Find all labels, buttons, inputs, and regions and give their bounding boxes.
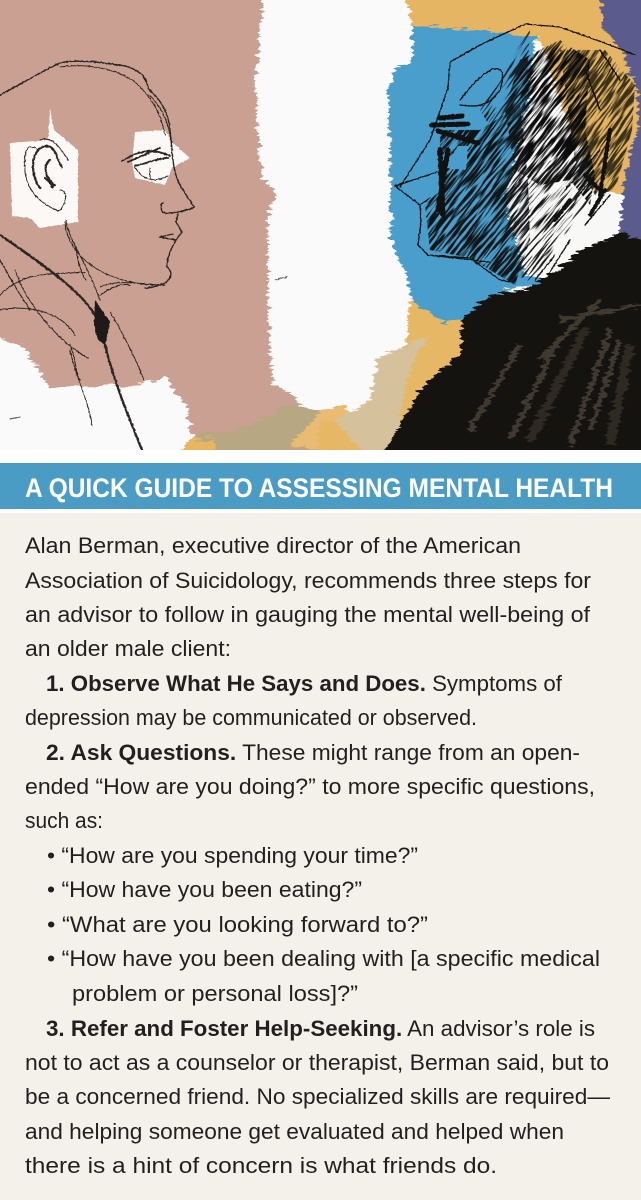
paint: white patches behind ear and eye (10, 108, 190, 228)
head outline and features (395, 24, 635, 282)
figure: right man, dark cross-hatched head and coat (384, 23, 641, 450)
head hatching: back of head (505, 40, 595, 206)
body copy: ended “How are you doing?” to more specific questions, (25, 774, 595, 799)
body copy: and helping someone get evaluated and helped when (25, 1119, 564, 1144)
body copy: be a concerned friend. No specialized skills are required— (25, 1084, 610, 1109)
body copy: depression may be communicated or observed. (25, 705, 477, 730)
paint: background colour fields (0, 0, 641, 460)
body copy: an advisor to follow in gauging the mental well-being of (25, 602, 591, 627)
body copy: • “How have you been eating?” (47, 877, 362, 902)
figure: left man, pencil sketch (0, 61, 287, 450)
body copy: such as: (25, 808, 103, 833)
body copy: Association of Suicidology, recommends three steps for (25, 568, 592, 593)
body copy: • “What are you looking forward to?” (47, 912, 428, 937)
body copy: an older male client: (25, 636, 231, 661)
head hatching: neck (508, 152, 592, 281)
body copy: 3. Refer and Foster Help-Seeking. An advisor’s role is (46, 1016, 595, 1041)
body copy: Alan Berman, executive director of the American (25, 533, 521, 558)
head hatching: crown (480, 30, 530, 132)
body copy: • “How have you been dealing with [a specific medical (47, 946, 600, 971)
head hatching: face (425, 105, 530, 285)
body copy: problem or personal loss]?” (72, 981, 358, 1006)
body copy: 2. Ask Questions. These might range from an open- (46, 740, 580, 765)
section heading banner (0, 463, 641, 509)
body copy: • “How are you spending your time?” (47, 843, 418, 868)
body copy: not to act as a counselor or therapist, Berman said, but to (25, 1050, 609, 1075)
panel: article text on cream background (0, 513, 641, 1200)
body copy: 1. Observe What He Says and Does. Symptoms of (46, 671, 563, 696)
head hatching: yellow-side hair (560, 50, 636, 196)
body copy: there is a hint of concern is what friends do. (25, 1153, 497, 1178)
illustration: two men in profile facing each other (0, 0, 641, 450)
coat (380, 233, 641, 460)
